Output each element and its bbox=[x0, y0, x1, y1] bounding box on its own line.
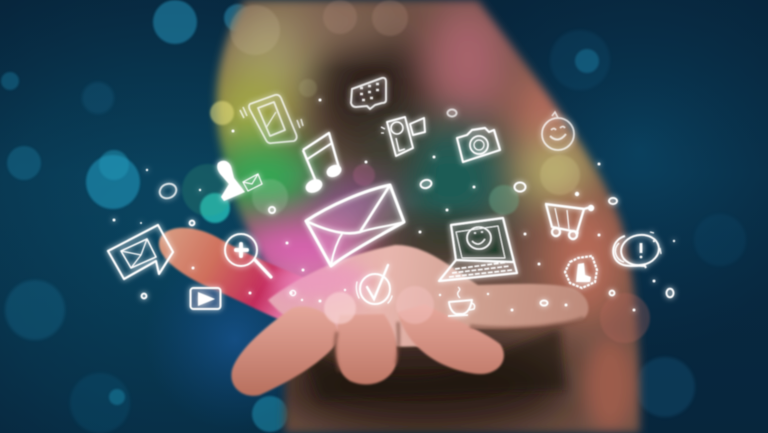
small white rings bbox=[142, 110, 674, 306]
icon: smiley face badge bbox=[542, 112, 574, 150]
icon: boot stamp bbox=[565, 256, 597, 288]
hand: ring finger bbox=[335, 314, 397, 384]
bokeh: pale circles over body and hand bbox=[182, 0, 650, 343]
icon: pushpin with small envelope bbox=[217, 161, 262, 201]
blurred body with rainbow light bbox=[200, 0, 660, 433]
icon: chat bubble with dots bbox=[351, 78, 386, 109]
hand: crease shadows bbox=[335, 318, 584, 372]
icon: magnifier with plus bbox=[225, 234, 271, 277]
icon: music note bbox=[303, 133, 342, 194]
hand: shadow under palm bbox=[300, 328, 565, 400]
icon: smartphone bbox=[240, 95, 303, 143]
icon: envelope speech bubble bbox=[108, 225, 173, 279]
icon: laptop with smiley bbox=[439, 218, 517, 281]
icon: alert speech bubbles bbox=[613, 232, 661, 268]
white dots scattered around icons bbox=[112, 98, 675, 312]
icon: photo camera bbox=[457, 128, 500, 162]
icon: video camera bbox=[381, 117, 425, 156]
hand: palm and thumb bbox=[268, 245, 588, 347]
hand: middle finger bbox=[398, 304, 504, 374]
icon: coffee cup bbox=[448, 287, 475, 316]
hand: index finger bbox=[159, 228, 310, 330]
icon: shopping cart bbox=[545, 204, 593, 239]
hand: little finger bbox=[231, 306, 339, 396]
pink light on palm bbox=[270, 260, 370, 300]
icon: check mark in circle bbox=[356, 265, 392, 304]
icon: large envelope bbox=[306, 185, 404, 266]
icon: video play bbox=[190, 288, 220, 309]
